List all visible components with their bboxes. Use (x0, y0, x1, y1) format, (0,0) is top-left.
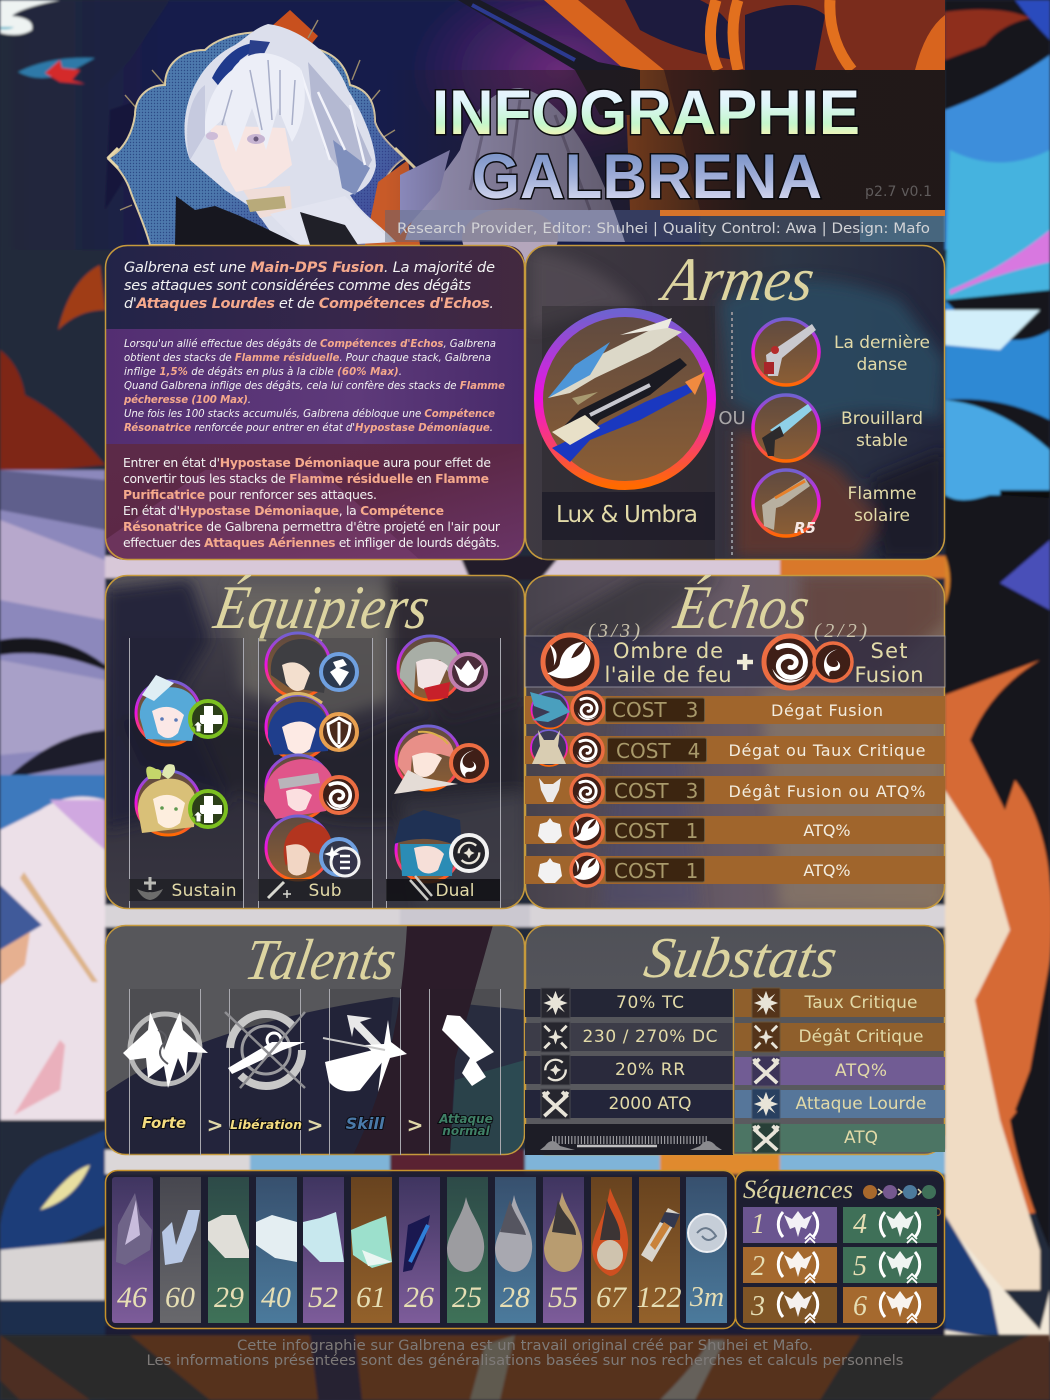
intro hypostase: Entrer en état d'Hypostase Démoniaque aura pour effet de (123, 455, 491, 470)
sequence 3: 3 (750, 1291, 765, 1322)
echo row 5: COST (614, 859, 669, 883)
material 5: 52 (308, 1281, 338, 1314)
panel: talents (105, 925, 525, 1155)
intro hypostase: Purificatrice pour renforcer ses attaques. (123, 487, 377, 502)
weapon option: La dernière danse: La dernière (834, 333, 930, 353)
echo row 2: COST (616, 739, 671, 763)
title text: GALBRENA (472, 142, 822, 212)
target stats: 70% TC (616, 993, 684, 1013)
intro hypostase: En état d'Hypostase Démoniaque, la Compétence (123, 503, 444, 518)
sequence 3 (743, 1287, 837, 1323)
echo row 4 (525, 815, 945, 847)
echo row 5: 1 (686, 859, 698, 883)
set header band (525, 620, 945, 689)
material 7: 26 (404, 1281, 434, 1314)
priority arrows: > (307, 1113, 323, 1137)
labels: talent priority (142, 1112, 493, 1138)
intro summary (124, 260, 495, 312)
set header band: (2/2) (814, 620, 867, 642)
echo row 3 (525, 775, 945, 807)
panel: echos (525, 572, 945, 910)
portrait: Galbrena in ornate frame (108, 10, 420, 245)
set header band: Set (870, 639, 908, 663)
intro hypostase: effectuer des Attaques Aériennes et infliger de lourds dégâts. (123, 535, 500, 550)
weapon option: Flamme solaire: R5 (794, 519, 816, 537)
version: p2.7 v0.1 (865, 184, 932, 200)
role label: dual: Dual (436, 881, 474, 901)
panel: materials (106, 1170, 736, 1328)
weapon option: Brouillard stable: stable (856, 431, 908, 451)
heading: equipiers: Équipiers (209, 572, 435, 642)
material 2: 60 (165, 1281, 195, 1314)
weapon option: La dernière danse (753, 319, 930, 385)
title text (432, 78, 860, 212)
target stats: 2000 ATQ (608, 1094, 692, 1114)
sequence 5 (843, 1247, 937, 1283)
material 6: 61 (356, 1281, 386, 1314)
material 8: 25 (452, 1281, 482, 1314)
priority arrows: > (207, 1113, 223, 1137)
dim lower band (0, 1335, 1050, 1400)
material 3 (208, 1177, 249, 1323)
stray letter: p (933, 1204, 942, 1220)
badge: phrolova style (450, 654, 486, 690)
badge: healer 1 (190, 701, 226, 737)
priority stats: ATQ (844, 1128, 878, 1148)
echo row 1: 3 (686, 698, 698, 722)
echo row 2: Dégat ou Taux Critique (728, 741, 926, 760)
sequence 1 (743, 1207, 837, 1243)
material 4 (256, 1177, 297, 1323)
badge: rover (321, 654, 357, 690)
character: sub 2 (266, 693, 330, 759)
material 12 (636, 1177, 682, 1323)
role label: dual (386, 876, 500, 901)
footer (146, 1338, 904, 1369)
credits: Research Provider, Editor: Shuhei | Quality Control: Awa | Design: Mafo (397, 221, 930, 237)
intro mechanics (123, 338, 505, 434)
intro hypostase (123, 455, 501, 550)
panel: sequences (736, 1170, 944, 1328)
material 9 (495, 1177, 536, 1323)
icon: pistol (442, 1015, 494, 1086)
intro mechanics: pécheresse (100 Max). (123, 394, 251, 406)
material 12: 122 (636, 1281, 682, 1314)
sequence 1: 1 (751, 1209, 765, 1240)
labels: talent priority: Skill (346, 1114, 385, 1133)
material 6 (351, 1177, 392, 1323)
character: sustain 2 (136, 764, 200, 835)
badge: healer 2 (190, 791, 226, 827)
character: sub 4 (266, 816, 332, 880)
set header band: Ombre de (613, 639, 723, 663)
role label: sub (258, 879, 372, 901)
target stats: 230 / 270% DC (582, 1027, 718, 1047)
set header band: (3/3) (588, 620, 640, 642)
intro summary: ses attaques sont considérées comme des dégâts (124, 278, 471, 294)
character: sub 3 (264, 755, 334, 819)
ornament: equalizer wave (525, 1124, 733, 1155)
material 1 (112, 1177, 153, 1323)
sequence priority dots (863, 1185, 936, 1199)
panel: armes (526, 244, 945, 560)
echo row 1: Dégat Fusion (771, 701, 883, 720)
echo row 2: 4 (688, 739, 700, 763)
label: ou: OU (718, 408, 746, 429)
echo row 4: COST (614, 819, 669, 843)
icon: liberation (225, 1012, 305, 1088)
echo row 5: ATQ% (803, 861, 851, 880)
sequence 2: 2 (751, 1251, 765, 1282)
heading: substats: Substats (640, 925, 842, 990)
character: dual 3 (394, 810, 462, 882)
sequence 4 (843, 1207, 937, 1243)
title text: INFOGRAPHIE (432, 78, 860, 148)
right side (945, 0, 1050, 700)
role label: sustain (129, 877, 243, 901)
material 7 (399, 1177, 440, 1323)
material 13 (686, 1177, 727, 1323)
material 8 (447, 1177, 488, 1323)
sequence 5: 5 (853, 1251, 867, 1282)
label: Lux & Umbra (542, 492, 715, 540)
priority stats: ATQ% (835, 1061, 887, 1081)
intro mechanics: Résonatrice renforcée pour entrer en état d'Hypostase Démoniaque. (124, 422, 493, 434)
badge: shield (321, 714, 357, 750)
panel: introduction (105, 245, 525, 560)
material 13: 3m (689, 1282, 724, 1313)
material 2 (160, 1177, 201, 1323)
sequence 6: 6 (853, 1291, 867, 1322)
material 9: 28 (500, 1281, 530, 1314)
set header band: l'aile de feu (604, 663, 732, 687)
badge: support (321, 839, 359, 876)
main weapon: Lux & Umbra (538, 312, 712, 486)
labels: talent priority: normal (442, 1124, 491, 1138)
priority stats: Taux Critique (804, 993, 918, 1013)
echo row 3: 3 (686, 779, 698, 803)
character: sub 1 (266, 633, 330, 697)
panel: equipiers (105, 572, 525, 910)
material 5 (303, 1177, 344, 1323)
intro mechanics: Une fois les 100 stacks accumulés, Galbrena débloque une Compétence (124, 408, 495, 420)
weapon option: Flamme solaire (753, 470, 916, 537)
weapon option: Flamme solaire: Flamme (848, 484, 916, 504)
heading: echos: Échos (669, 572, 815, 642)
intro mechanics: obtient des stacks de Flamme résiduelle. Pour chaque stack, Galbrena (124, 352, 491, 364)
character: sustain 1 (136, 675, 200, 745)
heading: talents: Talents (241, 927, 401, 992)
heading: armes: Armes (655, 244, 820, 314)
sequence 2 (743, 1247, 837, 1283)
material 1: 46 (117, 1281, 147, 1314)
badge: fusion (321, 777, 357, 813)
weapon option: Brouillard stable (753, 395, 923, 461)
role label: sustain: Sustain (172, 881, 236, 901)
intro mechanics: inflige 1,5% de dégâts en plus à la cible (60% Max). (124, 366, 402, 378)
footer: Les informations présentées sont des généralisations basées sur nos recherches et calculs personnels (146, 1353, 904, 1369)
footer: Cette infographie sur Galbrena est un travail original créé par Shuhei et Mafo. (237, 1338, 813, 1354)
sequence 4: 4 (853, 1209, 867, 1240)
labels: talent priority: Attaque (438, 1112, 493, 1126)
heading: sequences: Séquences (743, 1175, 853, 1204)
badge: fusion 2 (451, 745, 487, 781)
echo row 5 (525, 854, 945, 886)
echo row 3: Dégât Fusion ou ATQ% (728, 782, 926, 801)
target stats: 20% RR (615, 1060, 685, 1080)
material 11: 67 (596, 1281, 628, 1314)
weapon option: Brouillard stable: Brouillard (841, 409, 923, 429)
intro hypostase: convertir tous les stacks de Flamme résiduelle en Flamme (123, 471, 489, 486)
intro summary: Galbrena est une Main-DPS Fusion. La majorité de (124, 260, 495, 276)
priority arrows (207, 1113, 423, 1137)
material 3: 29 (214, 1281, 244, 1314)
center gaps (105, 556, 945, 578)
echo row 3: COST (614, 779, 669, 803)
labels: talent priority: Libération (230, 1117, 302, 1132)
role label: sub: Sub (308, 881, 342, 901)
labels: talent priority: Forte (142, 1114, 186, 1132)
intro mechanics: Quand Galbrena inflige des dégâts, cela lui confère des stacks de Flamme (124, 380, 505, 392)
set header band: Fusion (854, 663, 924, 687)
panel: substats (525, 925, 945, 1155)
icon: forte (123, 1012, 208, 1088)
echo row 4: ATQ% (803, 821, 851, 840)
label: Lux & Umbra: Lux & Umbra (556, 502, 698, 528)
icon: skill (323, 1015, 407, 1092)
priority stats (735, 988, 945, 1153)
weapon option: Flamme solaire: solaire (854, 506, 910, 526)
intro mechanics: Lorsqu'un allié effectue des dégâts de Compétences d'Echos, Galbrena (124, 338, 496, 350)
material 11 (591, 1177, 632, 1323)
character: dual 1 (398, 636, 462, 700)
material 4: 40 (261, 1281, 291, 1314)
priority stats: Dégât Critique (798, 1027, 924, 1047)
echo row 2 (525, 730, 945, 766)
title panel (385, 0, 945, 268)
weapon option: La dernière danse: danse (856, 355, 908, 375)
echo row 4: 1 (686, 819, 698, 843)
target stats (525, 988, 733, 1119)
character: dual 2 (394, 726, 460, 794)
echo row 1: COST (612, 698, 667, 722)
intro summary: d'Attaques Lourdes et de Compétences d'Echos. (124, 296, 494, 312)
priority stats: Attaque Lourde (796, 1094, 926, 1114)
sequence 6 (843, 1287, 937, 1323)
echo row 1 (525, 692, 945, 728)
intro hypostase: Résonatrice de Galbrena permettra d'être projeté en l'air pour (123, 519, 501, 534)
material 10 (543, 1177, 584, 1323)
badge: dual (451, 835, 487, 871)
priority arrows: > (407, 1113, 423, 1137)
material 10: 55 (548, 1281, 578, 1314)
